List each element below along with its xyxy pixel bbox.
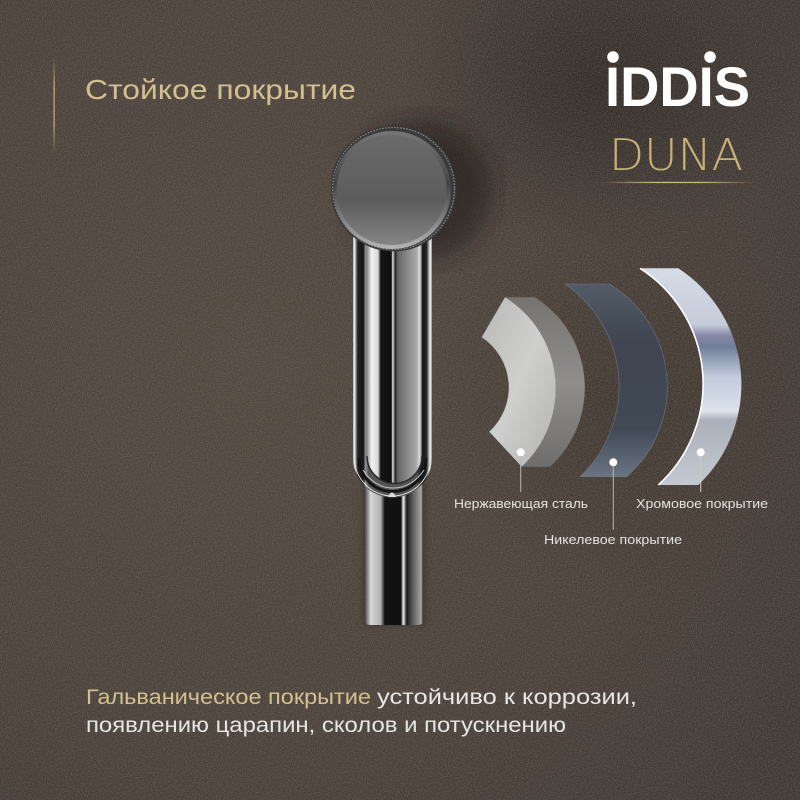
gold underline [600, 182, 756, 183]
logo: IDDIS: IDDIS [605, 55, 750, 118]
description text: Гальваническое покрытие [86, 685, 371, 709]
callout: chrome [636, 448, 768, 511]
looped handle [353, 235, 432, 498]
callout: stainless steel: Нержавеющая сталь [454, 496, 588, 511]
lower tube [362, 480, 426, 626]
series name: DUNA: DUNA [609, 130, 743, 181]
layer: chrome [640, 268, 741, 485]
product: chrome hand shower [330, 120, 492, 626]
layer: nickel [565, 284, 667, 477]
description text: устойчиво к коррозии, [377, 685, 637, 709]
layer: stainless steel [482, 297, 585, 467]
callout: stainless steel [454, 448, 588, 511]
round head [330, 126, 456, 252]
callout: chrome: Хромовое покрытие [636, 496, 768, 511]
callout: nickel: Никелевое покрытие [544, 532, 682, 547]
drop shadow [348, 120, 492, 260]
title: Стойкое покрытие [85, 74, 356, 105]
description text [86, 685, 637, 737]
layers diagram [454, 268, 768, 547]
callout: nickel [544, 458, 682, 547]
description text: появлению царапин, сколов и потускнению [86, 713, 566, 737]
title accent line [54, 56, 55, 154]
